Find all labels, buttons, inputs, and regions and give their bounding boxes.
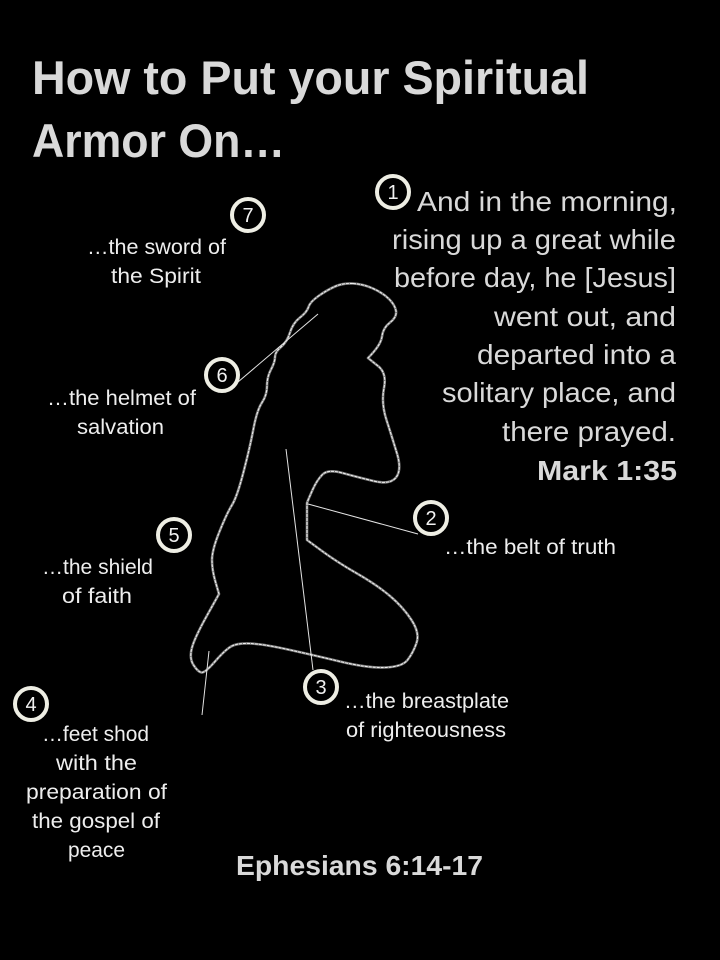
scripture reference: Ephesians 6:14-17: [236, 850, 483, 881]
Mark 1:35 verse: solitary place, and: [442, 377, 676, 408]
step 7 badge: 7: [242, 205, 254, 227]
title: Armor On…: [32, 114, 285, 167]
step 5 badge: 5: [168, 525, 180, 547]
label: sword of the Spirit: …the sword of: [87, 236, 226, 259]
label: feet shod: peace: [68, 839, 125, 862]
Mark 1:35 verse: departed into a: [477, 339, 676, 370]
Mark 1:35 verse: Mark 1:35: [537, 455, 677, 486]
Mark 1:35 verse: before day, he [Jesus]: [394, 262, 676, 293]
step 1 badge: 1: [387, 182, 399, 204]
step 7 badge: [232, 199, 264, 231]
label: breastplate of righteousness: of righteousness: [346, 719, 506, 742]
label: feet shod: preparation of: [26, 781, 167, 804]
label: shield of faith: …the shield: [42, 556, 153, 579]
figure: kneeling praying silhouette outline: [191, 283, 418, 673]
label: breastplate of righteousness: [344, 690, 509, 742]
step 6 badge: [206, 359, 238, 391]
title: How to Put your Spiritual: [32, 51, 589, 104]
label: feet shod: the gospel of: [32, 810, 160, 833]
step 2 badge: 2: [425, 508, 437, 530]
step 3 badge: [305, 671, 337, 703]
label: sword of the Spirit: [87, 236, 226, 288]
title: [32, 51, 589, 167]
step 2 badge: [415, 502, 447, 534]
label: breastplate of righteousness: …the breastplate: [344, 690, 509, 713]
step 5 badge: [158, 519, 190, 551]
label: shield of faith: of faith: [62, 585, 132, 608]
Mark 1:35 verse: And in the morning,: [417, 186, 677, 217]
label: helmet of salvation: …the helmet of: [47, 387, 196, 410]
pointer line: belt: [308, 504, 418, 534]
step 3 badge: 3: [315, 677, 327, 699]
step 6 badge: 6: [216, 365, 228, 387]
Mark 1:35 verse: rising up a great while: [392, 224, 676, 255]
label: sword of the Spirit: the Spirit: [111, 265, 201, 288]
Mark 1:35 verse: went out, and: [493, 301, 676, 332]
label: shield of faith: [42, 556, 153, 608]
label: feet shod: with the: [55, 752, 137, 775]
Mark 1:35 verse: there prayed.: [502, 416, 676, 447]
label: feet shod: …feet shod: [42, 723, 149, 746]
pointer line: breastplate: [286, 449, 313, 670]
pointer line: helmet: [238, 314, 318, 382]
Mark 1:35 verse: [392, 186, 677, 486]
label: belt of truth: …the belt of truth: [444, 536, 616, 559]
label: helmet of salvation: [47, 387, 196, 439]
label: helmet of salvation: salvation: [77, 416, 164, 439]
step 4 badge: 4: [25, 694, 37, 716]
pointer line: feet: [202, 651, 209, 715]
step 1 badge: [377, 176, 409, 208]
label: feet shod: [26, 723, 167, 862]
step 4 badge: [15, 688, 47, 720]
